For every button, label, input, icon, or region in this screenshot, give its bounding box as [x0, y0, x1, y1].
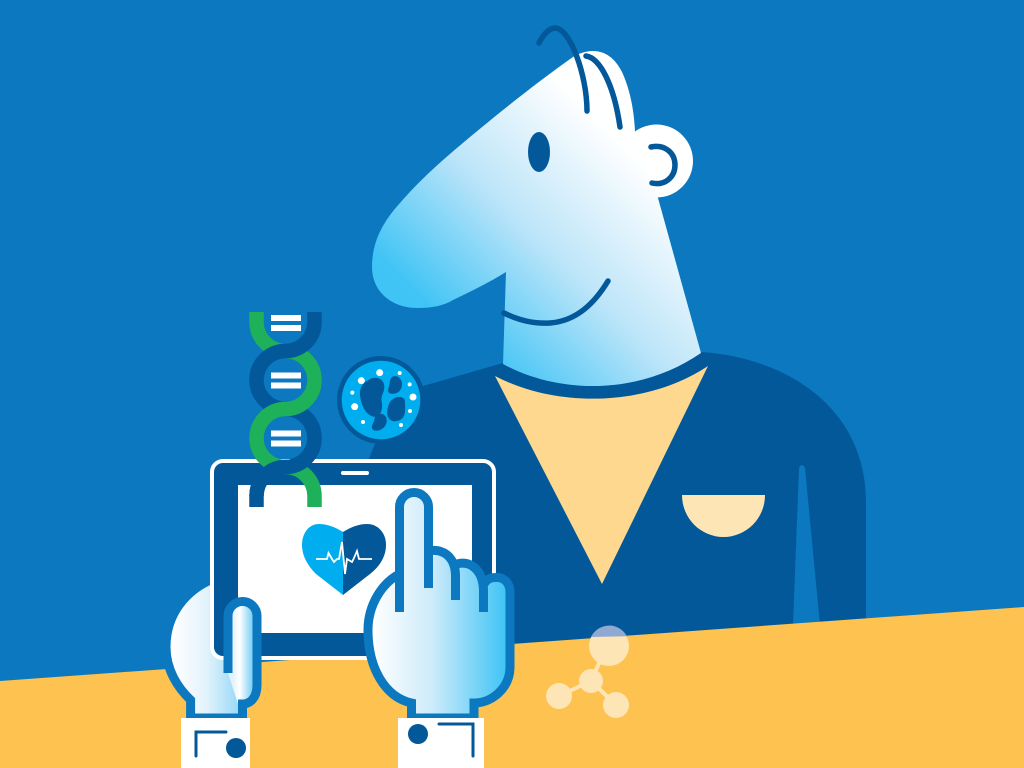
- DNA helix: [256, 305, 314, 515]
- molecule: [546, 626, 629, 718]
- left thumb: [228, 602, 257, 718]
- cell icon: [337, 356, 425, 444]
- coat pocket: [682, 495, 765, 537]
- left hand palm: [166, 578, 262, 718]
- eye: [528, 132, 550, 172]
- face: [372, 51, 701, 386]
- ear: [620, 124, 693, 198]
- doctor head: [372, 28, 701, 386]
- right cuff: [398, 718, 484, 768]
- doctor body: [300, 352, 866, 665]
- shirt collar V: [495, 366, 708, 584]
- tablet speaker: [341, 471, 369, 475]
- dark strand: [256, 305, 314, 515]
- hair strands: [539, 28, 620, 127]
- heart icon: [302, 524, 386, 595]
- table: [0, 607, 1024, 768]
- green strand: [256, 305, 314, 515]
- dark strand overlaps: [256, 322, 314, 496]
- hand outline and finger lines: [368, 493, 510, 718]
- inner ear: [651, 146, 675, 184]
- cell nuclei: [360, 376, 405, 431]
- tablet: [212, 461, 494, 658]
- smile: [504, 281, 608, 323]
- heartbeat line: [316, 542, 372, 574]
- left cuff: [181, 718, 250, 768]
- tablet screen: [238, 485, 472, 633]
- right hand pointing: [368, 493, 510, 718]
- DNA base pairs: [271, 315, 301, 446]
- sleeve crease: [793, 465, 820, 625]
- cell particles: [350, 369, 416, 427]
